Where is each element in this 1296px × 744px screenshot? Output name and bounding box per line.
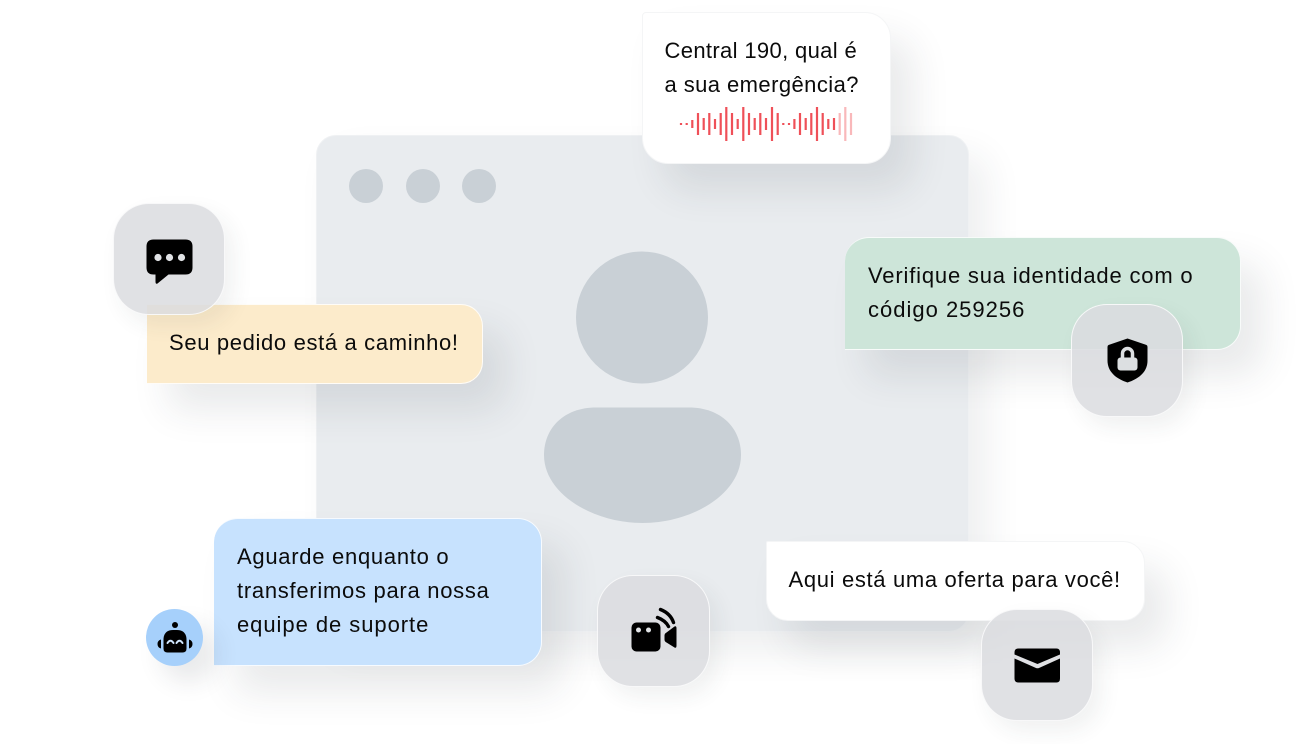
- icon: envelope tile: [981, 609, 1093, 721]
- bubble: identity code: [845, 237, 1241, 350]
- bubble: order on its way: [147, 304, 483, 384]
- window dots and user silhouette: [349, 169, 741, 523]
- text: order status: Seu pedido está a caminho!: [169, 330, 459, 355]
- icon: shield lock tile: [1071, 304, 1183, 417]
- text: verification code: código 259256: [868, 297, 1025, 322]
- bubble: offer: [766, 541, 1145, 621]
- text: support message: [237, 544, 490, 637]
- audio waveform: [680, 107, 852, 141]
- bubble: emergency call: [642, 12, 891, 164]
- panel: profile window: [316, 135, 969, 632]
- bubble: support transfer: [214, 518, 542, 666]
- text: verification code: [868, 263, 1193, 322]
- text: support message: transferimos para nossa: [237, 578, 490, 603]
- text: emergency question: [664, 38, 859, 97]
- text: offer message: Aqui está uma oferta para você!: [788, 567, 1121, 592]
- text: emergency question: a sua emergência?: [664, 72, 859, 97]
- text: emergency question: Central 190, qual é: [664, 38, 857, 63]
- icon: robot avatar: [146, 608, 203, 666]
- text: verification code: Verifique sua identidade com o: [868, 263, 1193, 288]
- icon: chat tile: [113, 203, 225, 315]
- text: support message: Aguarde enquanto o: [237, 544, 449, 569]
- icon: video call tile: [597, 575, 710, 687]
- text: support message: equipe de suporte: [237, 612, 429, 637]
